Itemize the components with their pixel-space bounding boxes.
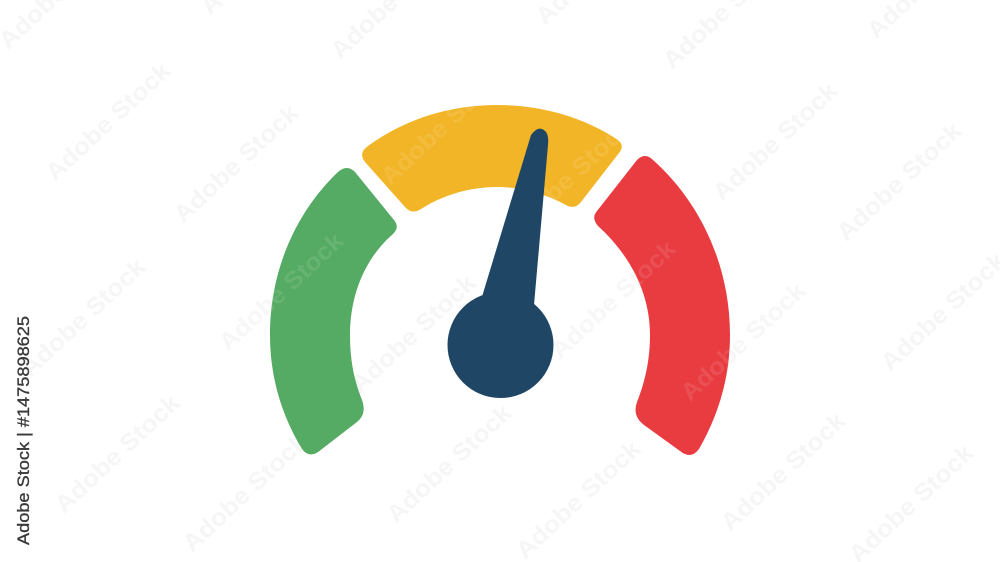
needle pointer [481, 129, 548, 305]
stock image id: Adobe Stock | #1475898625 [15, 316, 33, 545]
watermark pattern: Adobe Stock [346, 269, 482, 398]
watermark over gauge: Adobe Stock [376, 61, 512, 190]
gauge segment: yellow [362, 105, 622, 212]
watermark pattern: Adobe Stock [876, 247, 1000, 376]
gauge segment: green [270, 168, 397, 454]
watermark pattern: Adobe Stock [50, 389, 186, 518]
watermark pattern: Adobe Stock [832, 117, 968, 246]
watermark pattern: Adobe Stock [16, 253, 152, 382]
watermark pattern: Adobe Stock [41, 57, 177, 186]
watermark over gauge: Adobe Stock [502, 113, 638, 242]
watermark pattern: Adobe Stock [676, 277, 812, 406]
watermark pattern: Adobe Stock [511, 435, 647, 562]
watermark over gauge: Adobe Stock [214, 227, 350, 356]
watermark pattern: Adobe Stock [708, 77, 844, 206]
watermark pattern: Adobe Stock [178, 428, 314, 557]
watermark pattern: Adobe Stock [214, 227, 350, 356]
watermark pattern: Adobe Stock [382, 399, 518, 528]
watermark pattern: Adobe Stock [546, 235, 682, 364]
needle [448, 129, 554, 398]
watermark pattern: Adobe Stock [716, 407, 852, 536]
watermark pattern: Adobe Stock [169, 99, 305, 228]
watermark over gauge: Adobe Stock [546, 235, 682, 364]
gauge segment: red [594, 156, 730, 455]
watermark over gauge: Adobe Stock [676, 277, 812, 406]
needle hub [448, 292, 554, 398]
watermark over gauge [214, 61, 812, 406]
